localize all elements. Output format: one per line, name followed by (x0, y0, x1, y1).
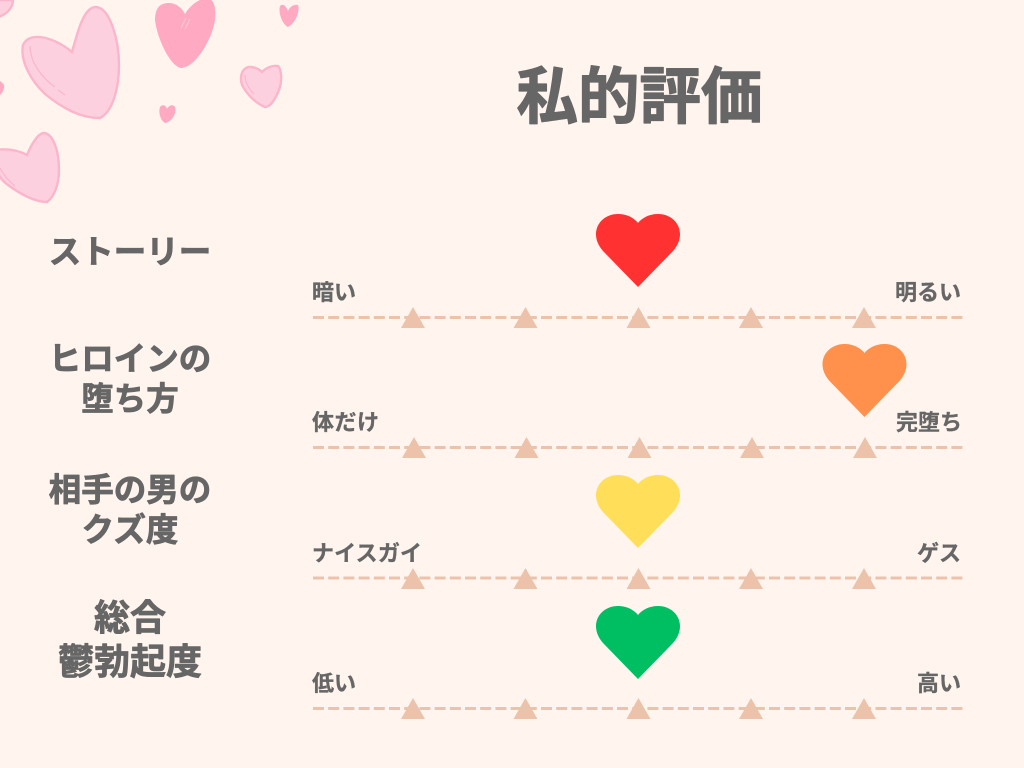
row: story (49, 214, 964, 328)
heart: orange rating (822, 344, 907, 417)
label: heroine fall: 堕ち方 (81, 381, 179, 417)
end label: body only: 体だけ (312, 410, 379, 435)
scale: heroine track (313, 437, 964, 458)
label: story: ストーリー (49, 234, 211, 270)
scale: partner track (313, 568, 964, 589)
label: heroine fall: ヒロインの (49, 341, 211, 377)
label: overall arousal: 総合 (94, 597, 166, 638)
label: overall arousal: 鬱勃起度 (58, 641, 202, 682)
row: heroine (49, 341, 964, 458)
scale: overall track (313, 698, 964, 719)
end label: complete fall: 完堕ち (896, 410, 962, 435)
decoration: scattered pink hearts (0, 0, 299, 202)
end label: nice guy: ナイスガイ (312, 541, 422, 566)
heart: red rating (596, 214, 680, 287)
end label: bright: 明るい (895, 280, 961, 305)
end label: scum: ゲス (917, 541, 961, 566)
end label: low: 低い (312, 671, 356, 696)
heart: yellow rating (596, 475, 680, 548)
heart: green rating (596, 606, 680, 679)
label: partner sleaze: クズ度 (82, 511, 178, 548)
row: overall (58, 597, 964, 719)
end label: high: 高い (917, 671, 961, 696)
row: partner (49, 472, 964, 589)
scale: story track (313, 307, 964, 328)
title: 私的評価 (516, 63, 763, 132)
end label: dark: 暗い (312, 280, 356, 305)
label: partner sleaze: 相手の男の (49, 472, 211, 508)
